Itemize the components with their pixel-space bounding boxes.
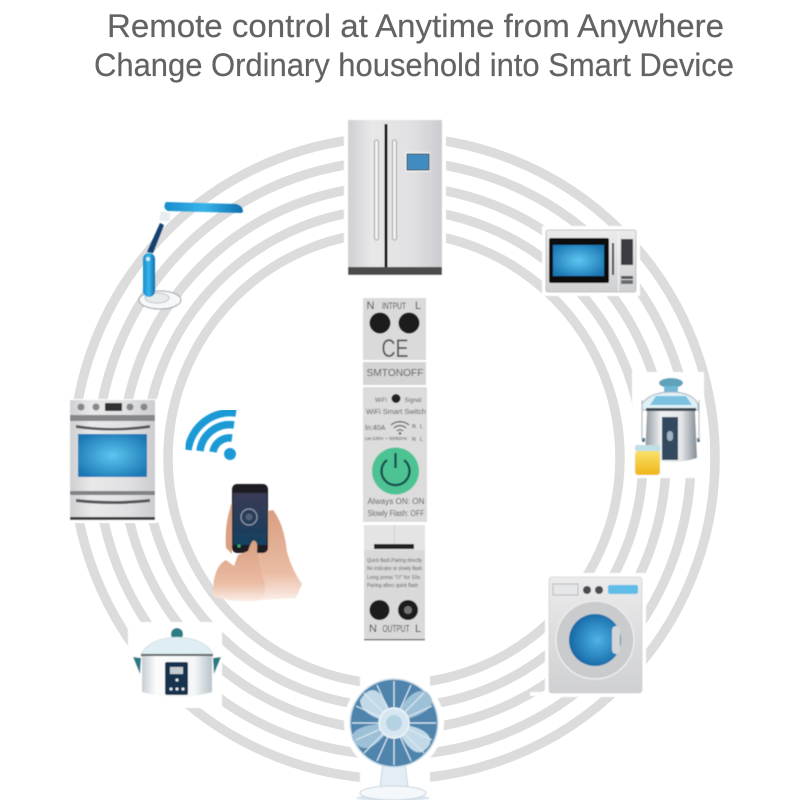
title <box>94 8 734 83</box>
concentric signal rings <box>73 137 715 779</box>
device input section: N <box>367 300 375 312</box>
device control panel: WiFi <box>375 398 387 404</box>
device control panel <box>363 387 427 522</box>
icon: juicer <box>632 372 704 478</box>
device output section: Pairing afterc quick flash <box>367 583 418 589</box>
icon: rice cooker <box>128 622 222 708</box>
icon: desk lamp <box>139 202 243 309</box>
device input section: L <box>415 300 421 312</box>
device input section: INTPUT <box>382 301 406 312</box>
device output section: Quick flash,Pairing directly <box>367 558 422 564</box>
device output section <box>364 550 425 640</box>
device control panel: Signal <box>405 398 421 404</box>
device control panel: N <box>412 424 416 430</box>
device control panel: WiFi Smart Switch <box>366 409 426 416</box>
power button <box>372 448 419 494</box>
device output section: L <box>415 623 421 635</box>
icon: oven <box>62 399 158 523</box>
device input section <box>363 298 426 363</box>
title: Change Ordinary household into Smart Device <box>94 47 734 83</box>
device switch slot <box>364 525 425 550</box>
icon: washing machine <box>530 573 650 697</box>
device input section: CE <box>382 335 408 363</box>
device output section: Long press "⏻" for 10s <box>367 575 420 581</box>
device: wifi smart switch <box>358 290 432 646</box>
device output section: N <box>369 623 377 635</box>
device control panel: In:40A <box>365 425 386 432</box>
device control panel: L <box>420 424 423 430</box>
device brand band: SMTONOFF <box>366 367 424 379</box>
device control panel: Slowly Flash: OFF <box>368 509 425 518</box>
icon: wifi <box>188 413 236 460</box>
icon: fan <box>344 672 444 800</box>
icon: refrigerator <box>344 116 446 280</box>
device control panel: Ue:230V ~ 50/60Hz <box>365 436 408 442</box>
device control panel: L <box>420 437 423 443</box>
icon: microwave <box>542 226 640 296</box>
device control panel: Always ON: ON <box>368 497 425 506</box>
icon: hand holding phone <box>213 484 302 601</box>
title: Remote control at Anytime from Anywhere <box>107 8 724 44</box>
device output section: OUTPUT <box>382 624 410 635</box>
device brand band <box>363 362 426 385</box>
device output section: No indicator or slowly flash <box>367 566 422 572</box>
device control panel: N <box>412 437 416 443</box>
